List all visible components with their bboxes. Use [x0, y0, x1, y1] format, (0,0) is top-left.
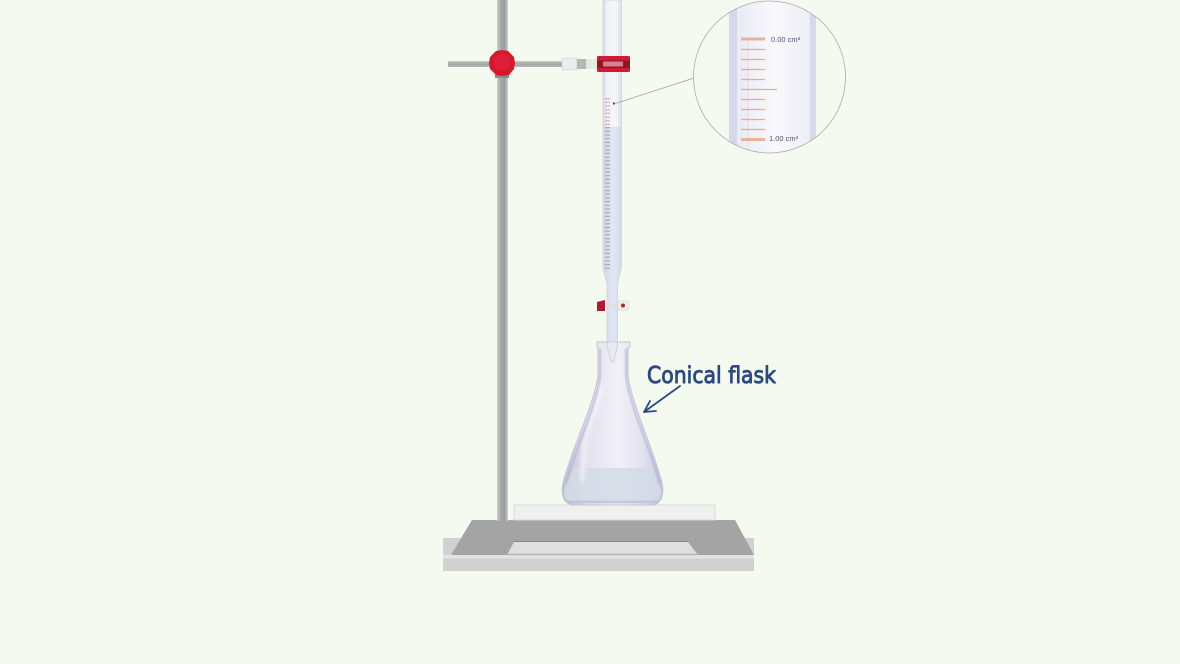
minor graduations — [741, 50, 777, 130]
arrow to flask — [644, 386, 680, 412]
flask liquid — [564, 468, 661, 503]
conical flask — [562, 342, 663, 505]
lens outline — [694, 1, 846, 153]
burette graduations — [605, 98, 610, 270]
label: conical flask: Conical flask — [647, 363, 777, 389]
titration apparatus diagram — [443, 0, 846, 571]
white tile — [514, 505, 715, 520]
flask thick wall — [566, 349, 660, 502]
burette liquid — [604, 127, 621, 347]
burette — [603, 0, 622, 347]
horizontal clamp arm — [448, 61, 564, 67]
callout line to magnifier — [614, 78, 694, 104]
boss head clamp — [489, 50, 515, 78]
burette clamp — [562, 56, 630, 72]
magnified burette tube — [729, 9, 737, 145]
major graduation 1.00 — [741, 138, 765, 141]
stopcock — [597, 300, 629, 311]
label 0.00: 0.00 cm³ — [771, 35, 801, 44]
magnifier lens — [694, 0, 846, 154]
flask highlight — [582, 385, 603, 482]
burette jet tip inside flask — [607, 342, 618, 362]
graduation spine — [748, 40, 749, 150]
major graduation 0.00 — [741, 38, 765, 40]
burette meniscus mark — [613, 102, 615, 104]
retort stand rod — [497, 0, 508, 521]
label 1.00: 1.00 cm³ — [769, 134, 799, 143]
burette glass tube — [603, 0, 622, 347]
retort stand base — [443, 520, 754, 571]
